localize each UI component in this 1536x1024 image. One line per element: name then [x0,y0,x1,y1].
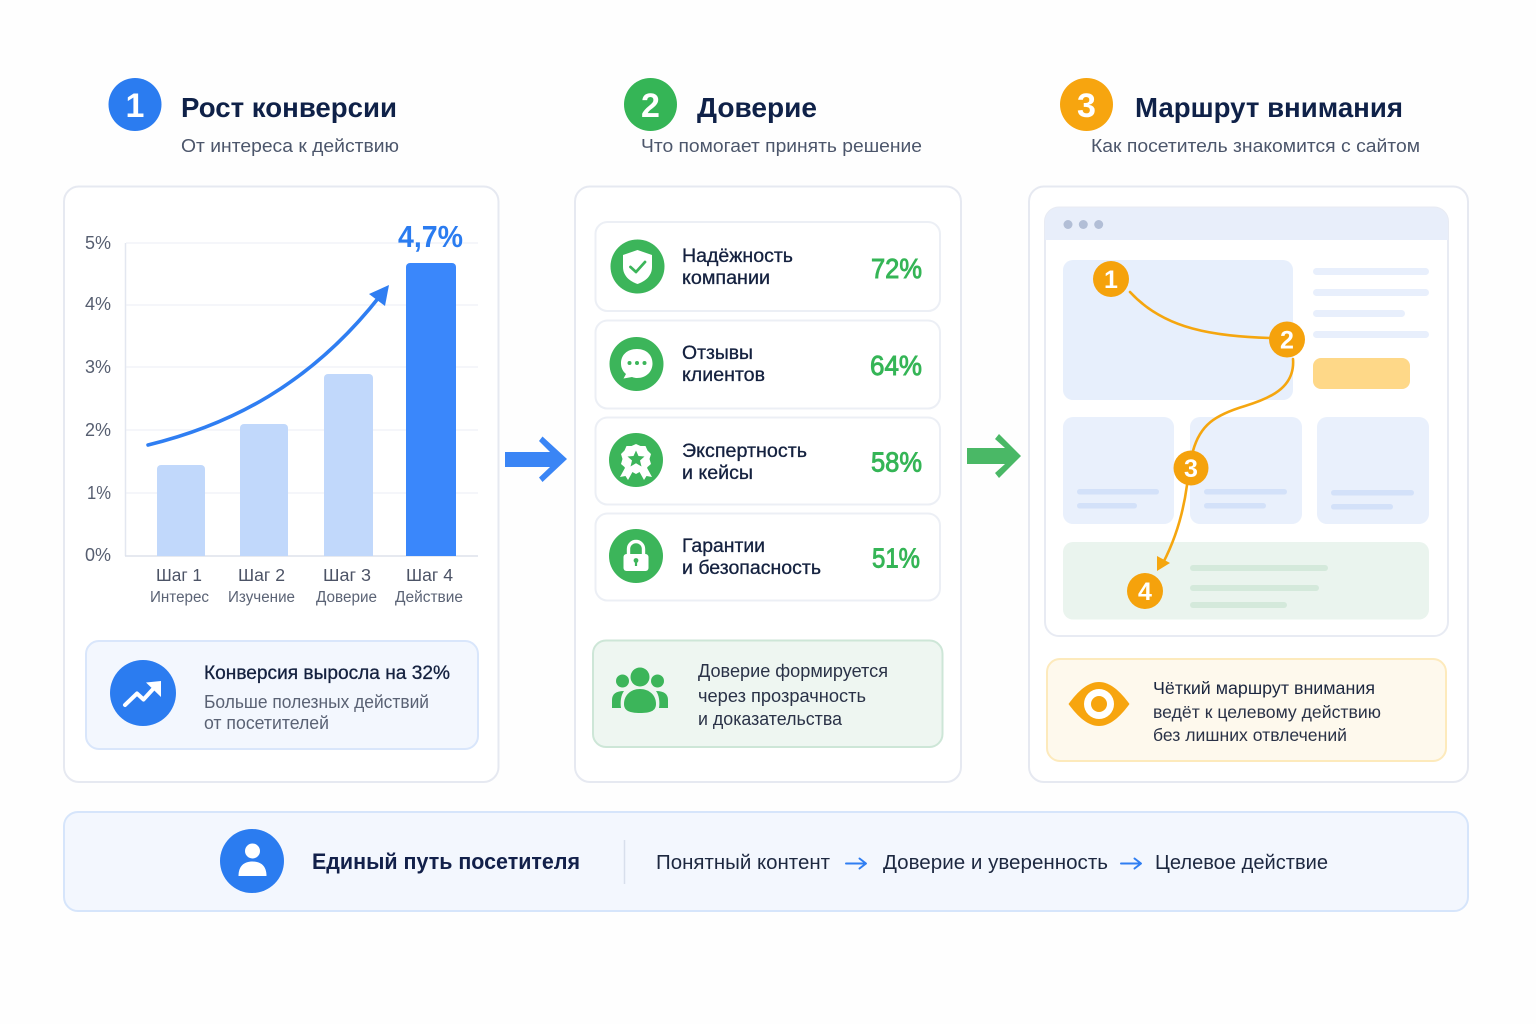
number badge 2: 2 [641,87,660,125]
callout text: без лишних отвлечений [1153,725,1347,745]
y axis labels: 3% [85,357,111,377]
arrow: step 1 to step 2 [846,858,866,868]
x axis labels: Изучение [228,589,295,606]
number badge 2 [624,78,677,131]
icon: user [220,829,284,893]
route marker 2: 2 [1280,326,1294,354]
bar: step 1 [157,465,205,556]
callout text [698,661,888,729]
route marker 1 [1093,261,1129,297]
y axis labels: 4% [85,294,111,314]
heading 3: Маршрут внимания [1135,92,1403,123]
route marker 3 [1174,450,1208,486]
panel: conversion growth [64,186,498,782]
row: guarantees [596,514,940,600]
icon: award [609,433,663,487]
callout text: через прозрачность [698,686,866,706]
label: компании [682,268,770,289]
icon: trend up [110,660,176,726]
value 51%: 51% [872,542,920,574]
label: Экспертность [682,441,807,462]
arrow: green, panel 2 to panel 3 [967,434,1021,478]
header 1: Рост конверсии [108,78,399,156]
subheading 1: От интереса к действию [181,136,399,156]
callout text: Чёткий маршрут внимания [1153,678,1375,698]
content card 3 [1317,417,1429,524]
heading 1: Рост конверсии [181,92,397,123]
panel: trust [575,186,961,782]
callout text: Доверие формируется [698,661,888,681]
label [682,441,807,484]
label [682,246,793,289]
x axis labels: Шаг 2 [238,565,285,585]
footer block [1063,542,1429,620]
growth arrow [148,285,389,445]
label: клиентов [682,365,765,386]
label: Гарантии [682,536,765,557]
row: expertise [596,418,940,504]
x axis labels: Шаг 4 [406,565,453,585]
callout text: Больше полезных действий [204,692,429,712]
x axis labels: Интерес [150,589,209,606]
value 64%: 64% [870,350,922,381]
y axis labels: 5% [85,233,111,253]
x axis labels: Действие [395,589,463,606]
subheading 3: Как посетитель знакомится с сайтом [1091,136,1420,156]
icon: padlock [609,529,663,583]
hero block [1063,260,1293,400]
arrow: blue, panel 1 to panel 2 [505,436,567,482]
step: target action: Целевое действие [1155,852,1328,874]
route marker 4: 4 [1138,578,1152,606]
callout text [204,663,450,733]
number badge 3: 3 [1077,87,1096,125]
route marker 1: 1 [1104,266,1118,294]
callout text: от посетителей [204,713,329,733]
banner heading: Единый путь посетителя [312,849,580,874]
label: и безопасность [682,558,821,579]
callout text [1153,678,1381,745]
icon: speech bubble [610,337,664,391]
route marker 4 [1127,573,1163,609]
x axis labels: Доверие [316,589,377,606]
route marker 2 [1269,322,1305,358]
bar: step 4 [406,263,456,556]
number badge 1: 1 [126,87,144,125]
callout text: Конверсия выросла на 32% [204,663,450,684]
icon: shield [610,240,664,294]
value label: 4,7% [398,219,463,254]
step: clear content: Понятный контент [656,852,830,874]
label [682,343,765,386]
banner: unified visitor journey [64,812,1468,911]
text lines [1313,268,1429,338]
arrow: step 2 to step 3 [1121,858,1141,868]
value 72%: 72% [871,253,922,284]
y axis labels: 2% [85,420,111,440]
heading 2: Доверие [697,92,817,123]
callout text: и доказательства [698,709,843,729]
bar: step 2 [240,424,288,556]
x axis labels [150,565,463,606]
label: Отзывы [682,343,753,364]
browser title bar [1045,208,1448,240]
callout: trust is built [593,640,942,747]
row: reviews [596,320,940,408]
panel: attention route [1029,186,1468,782]
value 58%: 58% [871,446,922,478]
label [682,536,821,579]
content card 1 [1063,417,1174,524]
callout text: ведёт к целевому действию [1153,702,1381,722]
content card 2 [1190,417,1302,524]
step: trust and confidence: Доверие и уверенность [883,852,1108,874]
header 3: Маршрут внимания [1060,78,1420,156]
row: reliability [596,222,940,311]
browser mockup [1045,208,1448,636]
number badge 3 [1060,78,1113,131]
bar: step 3 [324,374,373,556]
label: и кейсы [682,463,753,484]
callout: clear route [1047,659,1446,761]
y axis labels: 0% [85,545,111,565]
subheading 2: Что помогает принять решение [641,136,922,156]
route marker 3: 3 [1184,455,1198,483]
header 2: Доверие [624,78,922,156]
bar chart [85,219,478,606]
icon: eye [1068,682,1130,726]
call-to-action button [1313,358,1410,389]
label: Надёжность [682,246,793,267]
x axis labels: Шаг 3 [323,565,371,585]
x axis labels: Шаг 1 [156,565,202,585]
y axis labels: 1% [87,483,111,503]
attention route line [1130,292,1293,571]
number badge 1 [108,78,162,131]
y axis labels [85,233,111,565]
callout: conversion up 32% [86,641,478,749]
icon: people [612,668,668,713]
